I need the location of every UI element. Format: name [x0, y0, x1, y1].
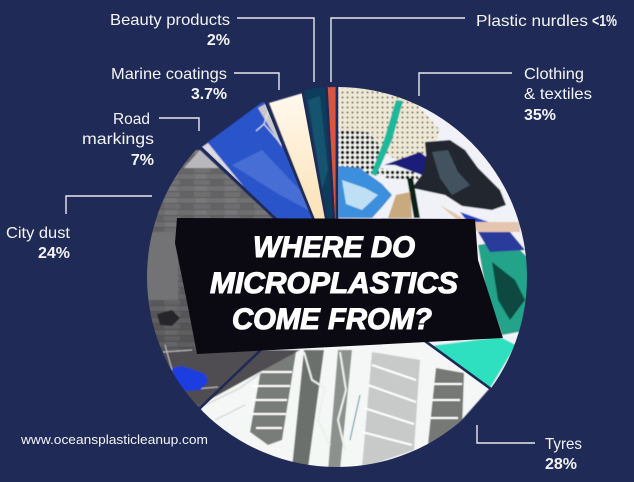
blue plastic fragment	[172, 366, 208, 391]
label: plastic nurdles: <1%	[592, 13, 617, 30]
slice: plastic nurdles	[326, 87, 336, 219]
title box	[175, 218, 503, 354]
label: clothing and textiles: 35%	[524, 107, 556, 124]
label: tyres: Tyres	[545, 436, 582, 453]
label: clothing and textiles: & textiles	[524, 86, 592, 103]
slice: tyres	[200, 342, 490, 467]
label: clothing and textiles: Clothing	[524, 66, 584, 83]
title: COME FROM?	[232, 303, 432, 336]
pie chart	[147, 87, 527, 467]
label: plastic nurdles	[331, 13, 617, 82]
label: city dust	[6, 196, 152, 262]
label: marine coatings: 3.7%	[191, 86, 227, 103]
slice: beauty products	[304, 88, 332, 218]
label: plastic nurdles: Plastic nurdles	[476, 13, 588, 30]
slice: road markings	[200, 101, 312, 218]
slice: city dust	[147, 149, 300, 408]
label: beauty products: Beauty products	[110, 12, 230, 29]
label: road markings	[82, 111, 199, 169]
label: road markings: Road	[113, 111, 150, 128]
label: beauty products	[110, 12, 314, 82]
title	[210, 231, 458, 336]
label: marine coatings	[111, 66, 279, 103]
title: WHERE DO	[253, 231, 415, 264]
label: beauty products: 2%	[207, 32, 230, 49]
slice: marine coatings	[268, 92, 325, 219]
label: tyres: 28%	[545, 456, 577, 473]
label: marine coatings: Marine coatings	[111, 66, 227, 83]
label: road markings: 7%	[131, 152, 154, 169]
label: road markings: markings	[82, 131, 154, 148]
label: clothing and textiles	[419, 66, 592, 124]
label: city dust: City dust	[6, 225, 71, 242]
slice dividers	[198, 80, 495, 410]
slice: clothing and textiles	[338, 87, 527, 388]
label: tyres	[477, 425, 582, 473]
website url: www.oceansplasticleanup.com	[20, 432, 208, 447]
title: MICROPLASTICS	[210, 267, 458, 300]
label: city dust: 24%	[38, 245, 70, 262]
